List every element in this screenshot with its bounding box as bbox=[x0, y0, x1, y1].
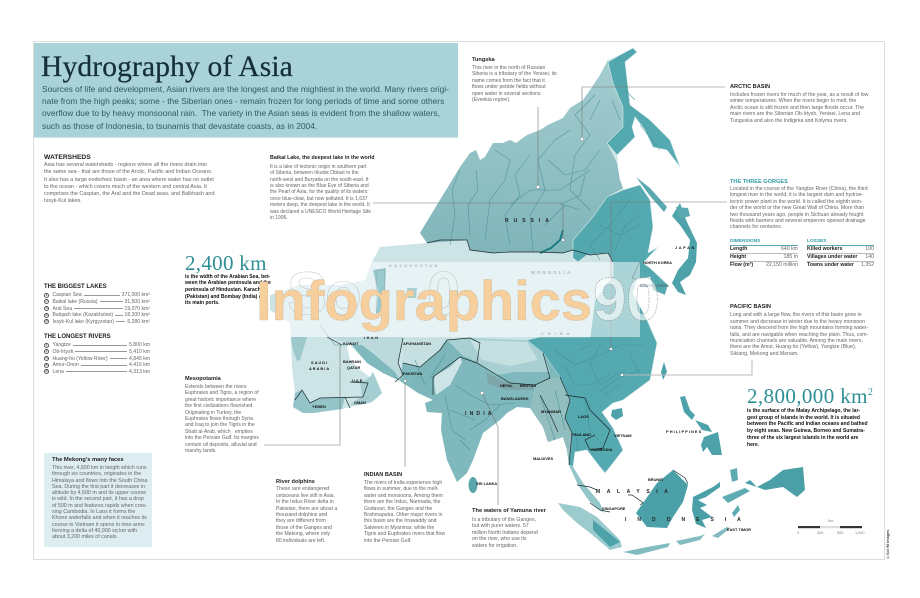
Yamuna text: Is a tributary of the Ganges, but with purer waters. 57 million North Indians depend on the river, who use its waters for irrigation. bbox=[472, 517, 538, 549]
country labels: SRI LANKA bbox=[476, 481, 497, 486]
Baikal text: It is a lake of tectonic origin in southern part of Siberia, between Irkutsk Oblast to the north-west and Buryatia on the south-east. It is also known as the Blue Eye of Siberia and the Pearl of Asia, for the quality of its waters: once blue-clear, but now polluted. It is 1,637 meters deep, the deepest lake in the world. It was declared a UNESCO World Heritage Site in 1996. bbox=[270, 164, 371, 221]
Taiwan and Hainan bbox=[611, 362, 667, 420]
country labels: PAKISTAN bbox=[403, 371, 422, 376]
watersheds: WATERSHEDS bbox=[44, 154, 91, 161]
biggest lakes table: Baikal lake (Russia) 31,500 km² bbox=[52, 299, 150, 305]
country labels: EAST TIMOR bbox=[727, 527, 751, 532]
country labels: OMAN bbox=[354, 400, 366, 405]
map scale: Km bbox=[828, 519, 833, 523]
country labels: CAMBODIA bbox=[591, 447, 613, 452]
Indus valley tone bbox=[412, 340, 462, 395]
country labels: U.A.E. bbox=[352, 378, 363, 383]
country labels: BAHRAIN bbox=[343, 359, 361, 364]
country labels: NORTH KOREA bbox=[643, 260, 672, 265]
Iran tones bbox=[330, 337, 403, 378]
country labels: NEPAL bbox=[500, 383, 514, 388]
longest rivers table: Yangtze 5,800 km bbox=[52, 342, 150, 348]
stat: Arabian Sea bbox=[185, 251, 271, 306]
losses table: 100 bbox=[865, 246, 874, 252]
dimensions table: Height bbox=[730, 254, 746, 260]
country labels: MONGOLIA bbox=[531, 270, 572, 275]
Pacific basin Manchuria and China bbox=[527, 185, 668, 473]
Yamuna text bbox=[472, 508, 546, 549]
country labels: MALAYSIA bbox=[596, 489, 674, 495]
country labels: QATAR bbox=[347, 365, 360, 370]
Sri Lanka bbox=[468, 477, 478, 493]
Indian basin text: The rivers of India experience high flows in summer, due to the melt- water and monsoons. Among them there are the Indus, Narmada, the Godavari, the Ganges and the Brahmaputra. Other major rivers in this basin are the Irrawaddy and Salween in Myanmar, while the Tigris and Euphrates rivers that flow into the Persian Gulf. bbox=[364, 480, 445, 544]
Java and lesser islands bbox=[623, 527, 730, 555]
Pacific basin text: Long and with a large flow, the rivers of this basin grow in summer and decrease in winter due to the heavy monsoon rains. They descend from the high mountains forming water- falls, and are navigable when reaching the plain. Thus, com- munication channels are valuable. Among the main rivers, there are the Amur, Huang-ho (Yellow), Yangtze (Blue), Sikiang, Mekong and Menam. bbox=[730, 312, 868, 357]
Indian basin bbox=[400, 340, 572, 482]
country labels: RUSSIA bbox=[505, 218, 554, 224]
dimensions table bbox=[730, 239, 798, 268]
Caspian and Aral seas bbox=[373, 268, 388, 313]
dimensions table: 22,150 million bbox=[766, 262, 798, 268]
longest rivers table: 4 bbox=[46, 363, 48, 367]
Borneo bbox=[636, 470, 688, 528]
country labels: BANGLADESH bbox=[501, 396, 529, 401]
dimensions table: Length bbox=[730, 246, 747, 252]
biggest lakes table: 2 bbox=[46, 299, 48, 303]
country labels: KUWAIT bbox=[343, 341, 359, 346]
Indian basin text: INDIAN BASIN bbox=[364, 472, 402, 478]
country labels bbox=[309, 218, 752, 532]
losses table: 1,352 bbox=[861, 262, 874, 268]
dimensions table: 640 km bbox=[781, 246, 798, 252]
biggest lakes table: 3 bbox=[46, 306, 48, 310]
national borders bbox=[295, 240, 688, 512]
stat text: is the surface of the Malay Archipelago, the lar- gest group of islands in the world. It is situated between the Pacific and Indian oceans and bathed by eight seas. New Guinea, Borneo and Sumatra- three of the six largest islands in the world are here. bbox=[747, 408, 868, 448]
Arctic basin text: Includes frozen rivers for much of the year, as a result of low winter temperatures. When the rivers begin to melt, the Arctic ocean is still frozen and then large floods occur. The main rivers are the Siberian Ob-Irtysh, Yenisei, Lena and Tunguska and also the Indigirka and Kolyma rivers. bbox=[730, 92, 868, 124]
longest rivers table: 3 bbox=[46, 356, 48, 360]
longest rivers table: Lena 4,313 km bbox=[52, 369, 150, 375]
biggest lakes table: 4 bbox=[46, 313, 48, 317]
map scale: 0 bbox=[797, 531, 799, 535]
longest rivers table: Huang-ho (Yellow River) 4,845 km bbox=[52, 356, 150, 362]
watermark: 90 bbox=[593, 266, 660, 333]
Baikal text: Baikal Lake, the deepest lake in the world bbox=[270, 155, 375, 161]
country labels: PHILIPPINES bbox=[666, 429, 702, 434]
country labels: IRAN bbox=[364, 335, 380, 340]
dimensions table: 185 m bbox=[784, 254, 798, 260]
country labels: SAUDI bbox=[311, 360, 328, 365]
Mekong text: The Mekong's many faces bbox=[52, 457, 124, 463]
longest rivers table: THE LONGEST RIVERS bbox=[44, 334, 111, 340]
stat number: 2,800,000 km2 bbox=[747, 384, 873, 408]
country labels: MALDIVES bbox=[533, 456, 554, 461]
Three Gorges text: THE THREE GORGES bbox=[730, 179, 788, 185]
longest rivers table bbox=[44, 334, 150, 375]
watermark: Infographics bbox=[256, 269, 592, 332]
Thar desert tone bbox=[433, 357, 462, 395]
country labels: SOUTH KOREA bbox=[640, 283, 669, 288]
losses table: LOSSES bbox=[807, 239, 826, 244]
Moluccas bbox=[722, 468, 750, 517]
biggest lakes table: Issyk-Kul lake (Kyrgyzstan) 6,280 km² bbox=[52, 319, 150, 325]
losses table bbox=[807, 239, 874, 268]
country labels: LAOS bbox=[578, 414, 589, 419]
Arctic basin bbox=[420, 60, 623, 253]
Arabia tones bbox=[291, 337, 307, 361]
country labels: ARABIA bbox=[309, 366, 330, 371]
Tungska text: Tungska bbox=[472, 57, 495, 63]
Philippines bbox=[680, 396, 722, 455]
country labels: JAPAN bbox=[675, 245, 696, 250]
watermark: Sol0 bbox=[287, 260, 460, 327]
Tungska text: This river in the north of Russian Siberia is a tributary of the Yenisei, its name comes from the fact that it flows under pebble fields without open water in several sections (Evenkia region). bbox=[472, 65, 557, 103]
Mesopotamia text: Extends between the rivers Euphrates and Tigris, a region of great historic importance where the first civilizations flourished. Originating in Turkey, the Euphrates flows through Syria and Iraq to join the Tigris in the Shatt al-Arab, which empties into the Persian Gulf. Its margins contain oil deposits, alluvial and marshy lands. bbox=[185, 384, 259, 454]
country labels: SINGAPORE bbox=[602, 506, 626, 511]
Japan bbox=[672, 203, 697, 295]
country labels: CHINA bbox=[541, 331, 573, 336]
country labels: INDIA bbox=[465, 411, 495, 417]
watersheds: Asia has several watersheds - regions where all the rivers drain into the same sea - that are those of the Arctic, Pacific and Indian Oceans. It also has a large endorheic basin - an area where water has no outlet to the ocean - which covers much of the western and central Asia. It comprises the Caspian, the Aral and the Dead seas, and Balkhash and Issyk-Kul lakes. bbox=[44, 162, 214, 204]
longest rivers table: 1 bbox=[46, 343, 48, 347]
title band bbox=[34, 43, 458, 138]
Myanmar tone bbox=[530, 377, 572, 465]
stat number: 2,400 km bbox=[185, 251, 267, 275]
Pacific basin north bbox=[607, 48, 680, 167]
Pacific basin text: PACIFIC BASIN bbox=[730, 304, 771, 310]
rivers bbox=[320, 90, 660, 450]
longest rivers table: Amur-Onon 4,416 km bbox=[52, 362, 150, 368]
biggest lakes table: THE BIGGEST LAKES bbox=[44, 284, 107, 290]
longest rivers table: 2 bbox=[46, 349, 48, 353]
biggest lakes table: Aral Sea 19,070 km² bbox=[52, 306, 150, 312]
biggest lakes table bbox=[44, 284, 150, 325]
Afghanistan tone bbox=[403, 338, 447, 367]
biggest lakes table: Caspian Sea 371,000 km² bbox=[52, 292, 150, 298]
map scale bbox=[797, 519, 865, 535]
longest rivers table: Ob-Irtysh 5,410 km bbox=[52, 349, 150, 355]
River dolphins text: These rare endangered cetaceans live still in Asia. In the Indus River delta in Pakistan, there are about a thousand dolphins and they are different from those of the Ganges and the Mekong, where only 80 individuals are left. bbox=[276, 486, 337, 544]
panel: Mekong bbox=[44, 453, 152, 547]
Sulawesi bbox=[692, 482, 720, 528]
Three Gorges text: Located in the course of the Yangtze River (China), the third longest river in the world, it is the largest dam and hydroe- lectric power plant in the world. It is called the eighth won- der of the world or the new Great Wall of China. More than two thousand years ago, people in Sichuan already fought floods with barriers and several emperors opened drainage channels for centuries. bbox=[730, 186, 868, 230]
Sumatra bbox=[558, 503, 622, 550]
country labels: BRUNEI bbox=[648, 477, 663, 482]
Arctic basin text: ARCTIC BASIN bbox=[730, 84, 770, 90]
dimensions table: Flow (m³) bbox=[730, 262, 753, 268]
losses table: Villages under water bbox=[807, 254, 857, 260]
country labels: THAILAND bbox=[571, 432, 591, 437]
biggest lakes table: 5 bbox=[46, 319, 48, 323]
credit: ©Sol 90 Images bbox=[886, 530, 890, 559]
country labels: BHUTAN bbox=[520, 383, 536, 388]
River dolphins text: River dolphins bbox=[276, 479, 315, 485]
country labels: AFGHANISTAN bbox=[403, 341, 431, 346]
Sakhalin and Hokkaido bbox=[636, 177, 690, 219]
losses table: Towns under water bbox=[807, 262, 854, 268]
title: Hydrography of Asia bbox=[41, 51, 293, 83]
Lake Baikal bbox=[540, 230, 563, 253]
stat text: is the width of the Arabian Sea, bet- ween the Arabian peninsula and the peninsula of Hindustan. Karachi (Pakistan) and Bombay (India) are its main ports. bbox=[185, 274, 271, 306]
map scale: 1,000 bbox=[855, 531, 865, 535]
map scale: 200 bbox=[817, 531, 823, 535]
Mekong text: This river, 4,500 km in length which runs through six countries, originates in the Himalaya and flows into the South China Sea. During the first part it decreases in altitude by 4,500 m and its upper course is wild. In the second part, it has a drop of 500 m and features rapids when cros- sing Cambodia. In Laos it forms the Khone waterfalls and when it reaches its course in Vietnam it opens in nine arms forming a delta of 40,000 sq km with about 3,200 miles of canals. bbox=[52, 465, 147, 540]
losses table: Killed workers bbox=[807, 246, 842, 252]
intro text: Sources of life and development, Asian rivers are the longest and the mightiest in the world. Many rivers origi- nate from the high peaks; some - the Siberian ones - remain frozen for long periods of time and some others overflow due to by heavy monsoonal rain. The variety in the Asian seas is evident from the shallow waters, such as those of Indonesia, to tsunamis that devastate coasts, as in 2004. bbox=[42, 84, 449, 131]
country labels: YEMEN bbox=[312, 404, 326, 409]
continent base bbox=[270, 48, 680, 513]
stat: Malay Archipelago bbox=[747, 384, 873, 448]
Himalaya and Tibet tones bbox=[447, 338, 550, 375]
country labels: KAZAKHSTAN bbox=[389, 263, 440, 268]
New Guinea bbox=[745, 467, 805, 497]
country labels: MYANMAR bbox=[541, 409, 561, 414]
dimensions table: DIMENSIONS bbox=[730, 239, 760, 244]
Yamuna text: The waters of Yamuna river bbox=[472, 508, 546, 514]
Mesopotamia text: Mesopotamia bbox=[185, 376, 221, 382]
country labels: INDONESIA bbox=[625, 517, 752, 523]
biggest lakes table: Balqash lake (Kazakhstan) 18,200 km² bbox=[52, 312, 150, 318]
losses table: 140 bbox=[865, 254, 874, 260]
Malay peninsula bbox=[569, 465, 604, 513]
biggest lakes table: 1 bbox=[46, 293, 48, 297]
country labels: VIETNAM bbox=[614, 433, 632, 438]
longest rivers table: 5 bbox=[46, 369, 48, 373]
map scale: 500 bbox=[837, 531, 843, 535]
